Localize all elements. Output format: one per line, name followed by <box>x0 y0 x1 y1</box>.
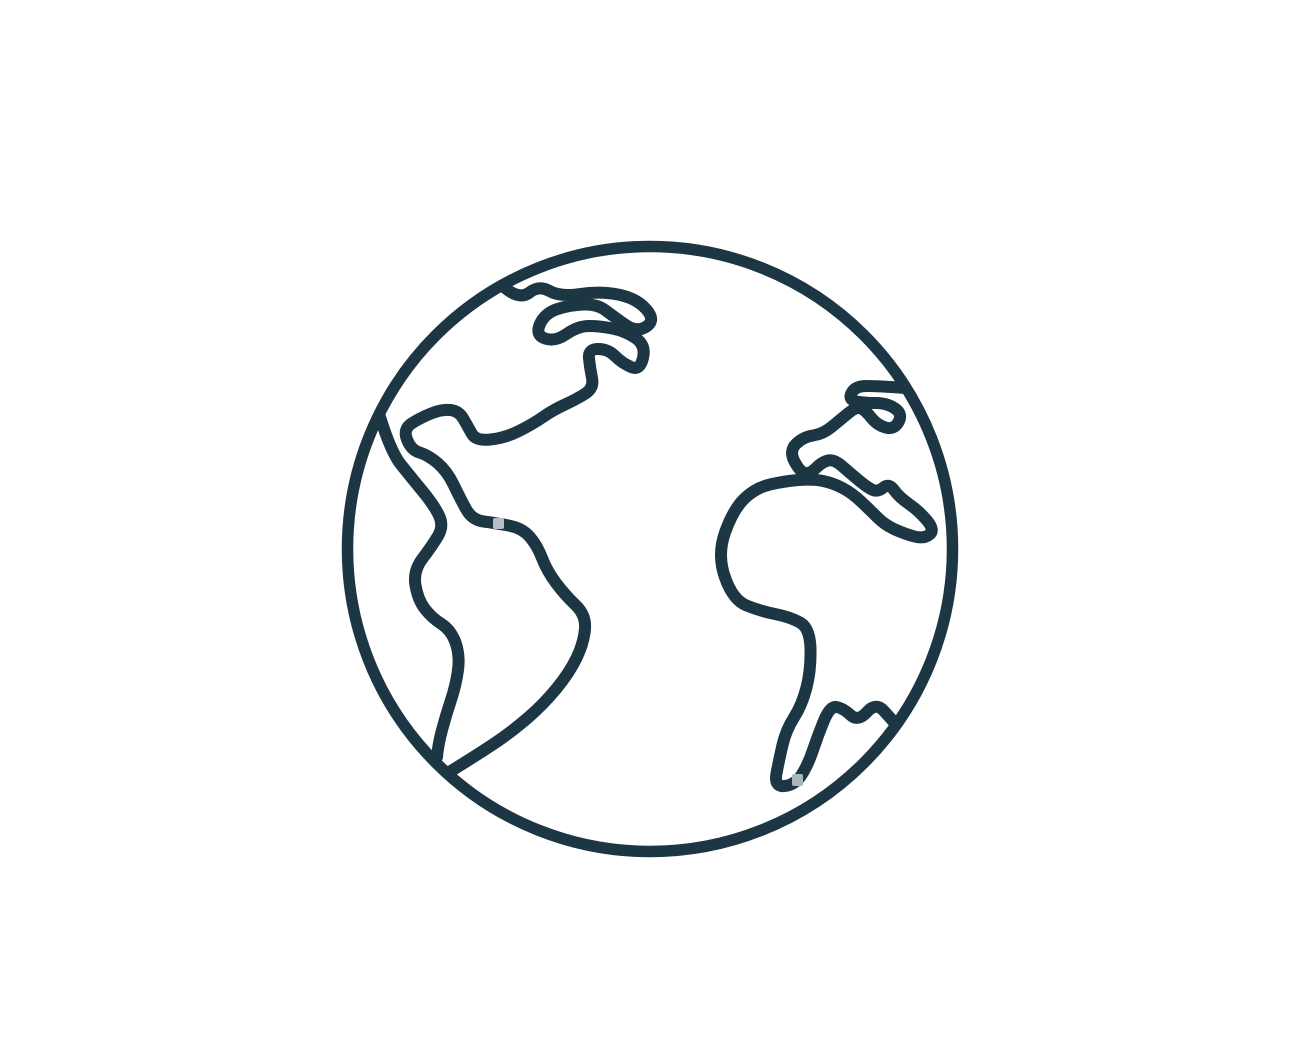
continent: Eurasia and Africa coastline <box>721 386 932 786</box>
watermark speck: South America coast <box>493 518 504 529</box>
globe outline <box>348 246 952 852</box>
watermark speck: Africa tip <box>792 774 803 786</box>
continent: North America and east coast of South America <box>406 288 651 771</box>
continent: west coast of the Americas <box>380 417 459 757</box>
